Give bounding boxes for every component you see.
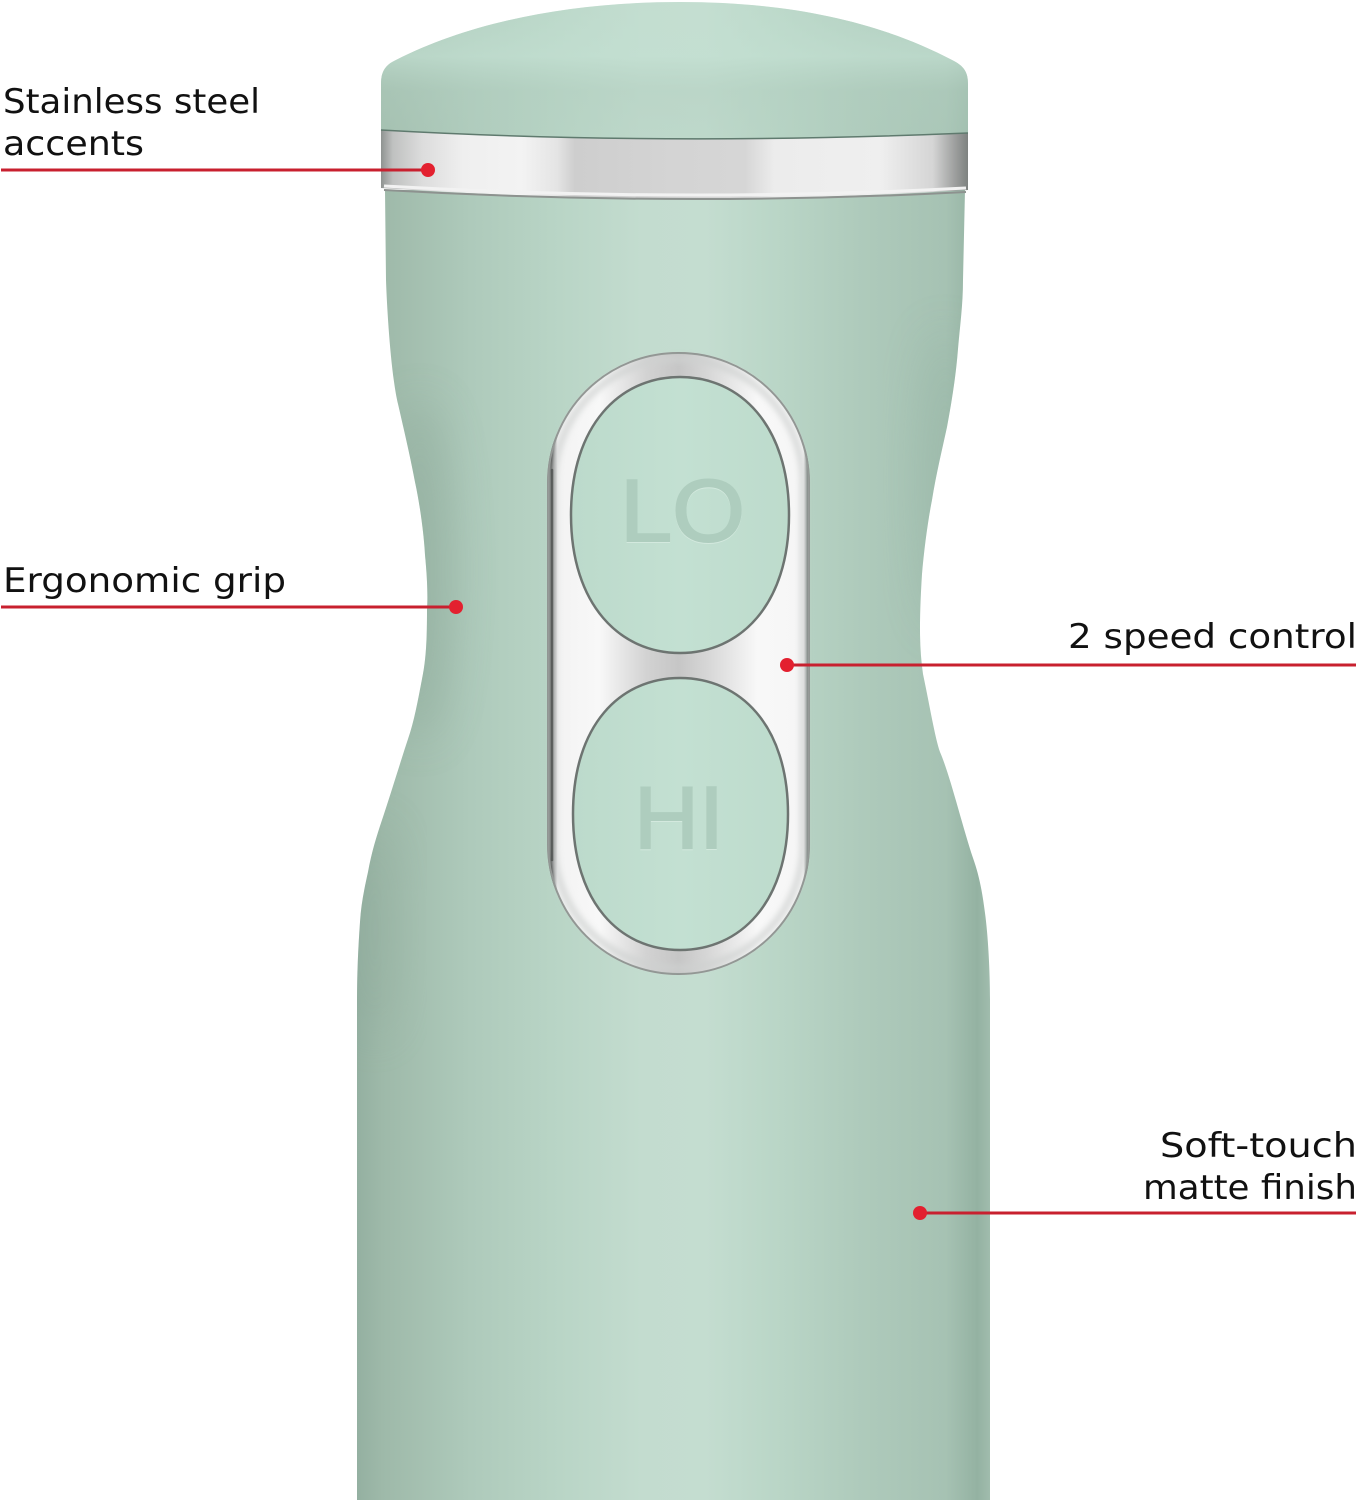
callout: soft-touch matte finish: Soft-touch (1160, 1126, 1357, 1166)
callout: stainless steel accents (1, 82, 435, 177)
LO button (571, 377, 789, 653)
LO button: LO (620, 461, 745, 560)
callout: stainless steel accents: accents (3, 124, 144, 164)
callout: 2 speed control (780, 617, 1357, 672)
callout: ergonomic grip (1, 561, 463, 614)
HI button: HI (634, 768, 724, 867)
stainless steel ring (381, 130, 968, 199)
callout: soft-touch matte finish (913, 1126, 1357, 1220)
callout: 2 speed control: 2 speed control (1068, 617, 1357, 657)
callout: ergonomic grip: Ergonomic grip (3, 561, 286, 601)
blender body (350, 185, 1000, 1500)
cap (381, 2, 968, 139)
callout: soft-touch matte finish: matte finish (1143, 1168, 1357, 1208)
speed control plate (547, 352, 810, 975)
callout: stainless steel accents: Stainless steel (3, 82, 260, 122)
HI button (573, 678, 788, 950)
